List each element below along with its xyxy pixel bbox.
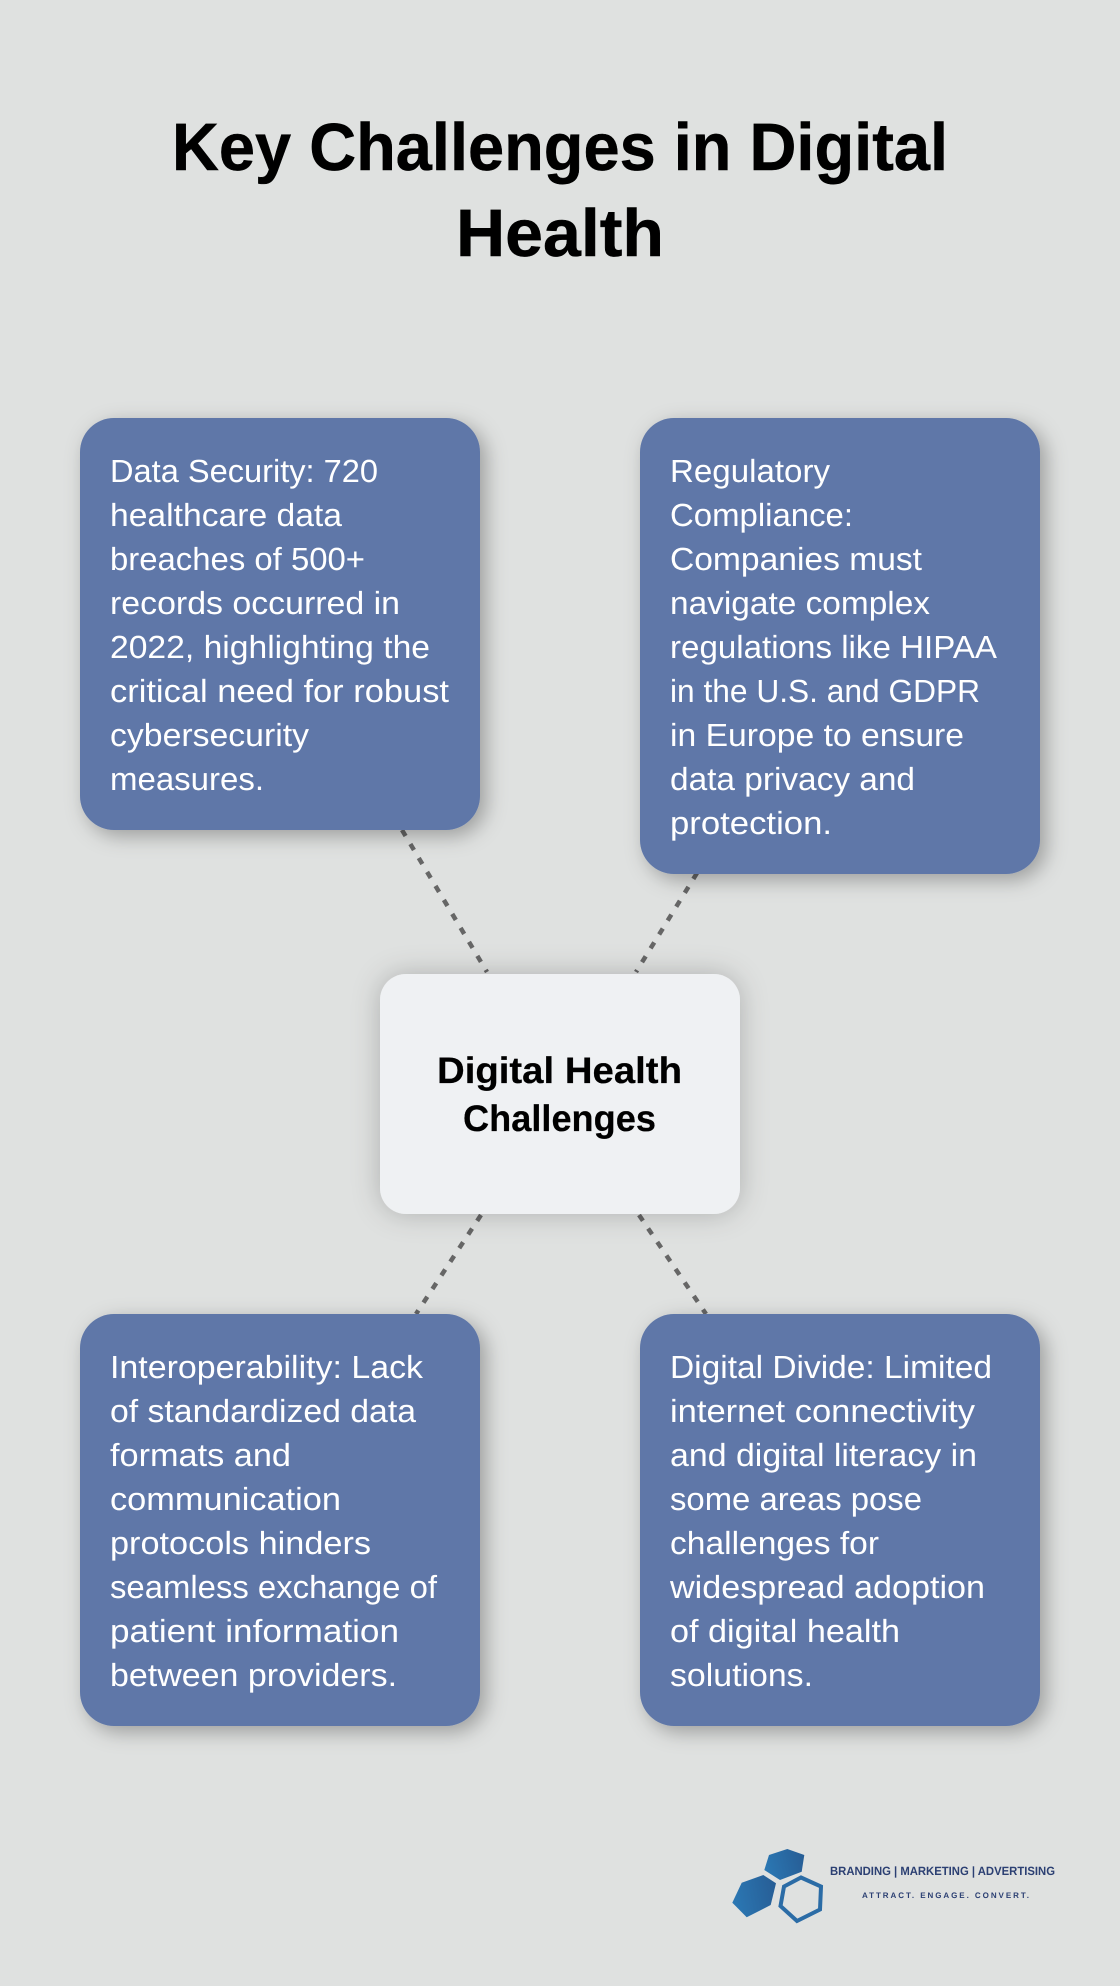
- title: Health: [456, 196, 664, 271]
- panel: regulatory compliance: Regulatory: [670, 453, 830, 489]
- panel: regulatory compliance: in Europe to ensure: [670, 717, 964, 753]
- panel: digital divide: widespread adoption: [669, 1569, 985, 1605]
- connector: interoperability to center: [416, 1215, 481, 1314]
- panel: digital divide: of digital health: [670, 1613, 900, 1649]
- panel: regulatory compliance: navigate complex: [670, 585, 930, 621]
- panel: regulatory compliance: in the U.S. and GDPR: [670, 673, 980, 709]
- panel: interoperability: seamless exchange of: [110, 1569, 437, 1605]
- panel: data security: cybersecurity: [110, 717, 309, 753]
- panel: interoperability: formats and: [110, 1437, 291, 1473]
- panel: interoperability: communication: [110, 1481, 341, 1517]
- panel: center node: Digital Health: [437, 1050, 682, 1091]
- panel: center node: Challenges: [463, 1098, 656, 1139]
- panel: digital divide: and digital literacy in: [670, 1437, 977, 1473]
- logo: [732, 1849, 1055, 1921]
- panel: data security: measures.: [110, 761, 264, 797]
- panel: interoperability: protocols hinders: [110, 1525, 371, 1561]
- panel: data security: healthcare data: [110, 497, 342, 533]
- panel: regulatory compliance: regulations like HIPAA: [670, 629, 998, 665]
- panel: data security: critical need for robust: [110, 673, 449, 709]
- panel: digital divide: solutions.: [670, 1657, 813, 1693]
- panel: digital divide: internet connectivity: [670, 1393, 975, 1429]
- panel: regulatory compliance: protection.: [670, 805, 832, 841]
- panel: interoperability: of standardized data: [110, 1393, 416, 1429]
- panel: interoperability: between providers.: [110, 1657, 397, 1693]
- connector: data security to center: [402, 830, 487, 972]
- panel: center node: [380, 974, 740, 1214]
- panel: interoperability: patient information: [110, 1613, 399, 1649]
- connector: digital divide to center: [639, 1215, 706, 1314]
- panel: regulatory compliance: Compliance:: [670, 497, 853, 533]
- panel: interoperability: Interoperability: Lack: [110, 1349, 424, 1385]
- panel: data security: 2022, highlighting the: [110, 629, 430, 665]
- panel: interoperability: [80, 1314, 480, 1726]
- connector: regulatory compliance to center: [636, 873, 697, 972]
- logo tagline: ATTRACT. ENGAGE. CONVERT.: [862, 1891, 1029, 1900]
- panel: regulatory compliance: [640, 418, 1040, 874]
- icon: hexagon cluster: [732, 1849, 821, 1921]
- panel: digital divide: Digital Divide: Limited: [670, 1349, 992, 1385]
- panel: data security: Data Security: 720: [110, 453, 378, 489]
- logo tagline: [830, 1864, 1055, 1900]
- panel: digital divide: [640, 1314, 1040, 1726]
- panel: digital divide: challenges for: [670, 1525, 879, 1561]
- title: Key Challenges in Digital: [172, 110, 948, 185]
- panel: digital divide: some areas pose: [670, 1481, 922, 1517]
- logo tagline: BRANDING | MARKETING | ADVERTISING: [830, 1864, 1055, 1878]
- panel: regulatory compliance: Companies must: [670, 541, 922, 577]
- panel: data security: breaches of 500+: [110, 541, 365, 577]
- panel: data security: records occurred in: [110, 585, 400, 621]
- panel: regulatory compliance: data privacy and: [670, 761, 915, 797]
- title: [172, 110, 948, 271]
- panel: data security: [80, 418, 480, 830]
